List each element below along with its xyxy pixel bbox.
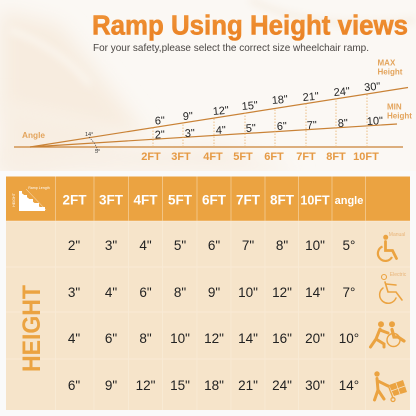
row 2 values	[68, 285, 355, 300]
max height values: 12"	[212, 105, 230, 118]
icon: manual wheelchair: Manual	[389, 232, 405, 238]
row 1 values: 10"	[305, 238, 325, 253]
row 1 values: 4"	[139, 238, 152, 253]
HEIGHT side label: HEIGHT	[18, 285, 46, 372]
header labels: 5FT	[168, 192, 193, 208]
ramp length labels: 2FT	[141, 151, 161, 163]
min height values: 3"	[185, 127, 195, 140]
max height values	[155, 81, 381, 127]
header labels: 2FT	[62, 192, 87, 208]
min height values: 5"	[246, 122, 256, 135]
max height label: Height	[378, 68, 403, 77]
row 3 values: 20"	[305, 331, 325, 346]
max height values: 9"	[183, 110, 193, 123]
min height ramp line	[30, 124, 397, 147]
row 3 values: 16"	[272, 331, 292, 346]
max height values: 6"	[155, 115, 165, 127]
header labels: 3FT	[99, 192, 124, 208]
max height ramp line	[30, 88, 408, 147]
min height values: 6"	[277, 120, 287, 133]
min height label: MIN	[387, 103, 402, 112]
row 3 values: 12"	[204, 331, 224, 346]
header corner diagram	[12, 186, 50, 211]
ramp length labels: 8FT	[326, 151, 346, 163]
table body	[6, 221, 410, 410]
angle values: 5°	[95, 149, 100, 155]
ramp length labels	[141, 151, 379, 163]
ramp length labels: 3FT	[171, 151, 191, 163]
row 4 values: 12"	[136, 378, 156, 393]
icon: person pushing cargo dolly	[374, 371, 407, 402]
row 2 values: 12"	[272, 285, 292, 300]
min height values: 4"	[216, 124, 226, 137]
height guide lines	[153, 93, 367, 147]
row 2 values: 8"	[174, 285, 186, 300]
header labels	[62, 192, 363, 208]
row 3 values: 8"	[139, 331, 152, 346]
max height values: 18"	[271, 94, 289, 107]
row 1 values: 3"	[105, 238, 117, 253]
header corner diagram: HEIGHT	[12, 192, 16, 207]
angle values	[85, 132, 100, 155]
row 2 values: 3"	[68, 285, 80, 300]
row 2 values: 6"	[139, 285, 152, 300]
header labels: 8FT	[270, 192, 295, 208]
ramp length labels: 4FT	[203, 151, 223, 163]
ramp length labels: 5FT	[233, 151, 253, 163]
row 3 values: 14"	[238, 331, 258, 346]
angle arc	[89, 137, 98, 151]
row 1 values	[68, 238, 355, 253]
row 3 values: 4"	[68, 331, 80, 346]
icon: electric wheelchair: Electric	[390, 272, 407, 278]
row 2 values: 10"	[238, 285, 258, 300]
min height values: 10"	[367, 115, 383, 128]
ramp angle diagram	[14, 58, 412, 163]
row 1 values: 7"	[242, 238, 254, 253]
header labels: 10FT	[300, 194, 330, 208]
header labels: 7FT	[236, 192, 261, 208]
min height values: 8"	[338, 117, 348, 130]
grid lines	[6, 176, 410, 410]
max height values: 15"	[241, 100, 258, 113]
row 3 values: 6"	[105, 331, 117, 346]
row 4 values: 14°	[339, 378, 359, 393]
icon: electric wheelchair	[380, 272, 407, 303]
row 4 values: 24"	[272, 378, 292, 393]
max height values: 24"	[333, 86, 350, 99]
row 2 values: 9"	[208, 285, 220, 300]
ramp length labels: 6FT	[264, 151, 284, 163]
table header	[6, 176, 410, 221]
row 4 values: 15"	[170, 378, 190, 393]
ground line	[14, 146, 403, 148]
row 4 values: 6"	[68, 378, 80, 393]
row 4 values: 9"	[105, 378, 117, 393]
subtitle: For your safety,please select the correct size wheelchair ramp.	[93, 43, 369, 54]
ramp length labels: 10FT	[353, 151, 379, 163]
min height values	[155, 115, 383, 141]
row 2 values: 4"	[105, 285, 117, 300]
header labels: angle	[335, 195, 363, 207]
row 3 values: 10°	[339, 331, 359, 346]
row 1 values: 5°	[343, 238, 355, 253]
row 1 values: 6"	[208, 238, 220, 253]
row 4 values	[68, 378, 359, 393]
angle label: Angle	[22, 130, 45, 140]
header labels: 6FT	[202, 192, 227, 208]
icon: manual wheelchair	[378, 232, 405, 261]
min height values: 7"	[307, 119, 317, 132]
row 2 values: 14"	[305, 285, 325, 300]
row 4 values: 21"	[238, 378, 258, 393]
max height values: 21"	[302, 91, 319, 104]
row 1 values: 2"	[68, 238, 80, 253]
max height values: 30"	[364, 81, 381, 94]
row 2 values: 7°	[343, 285, 355, 300]
header corner diagram: Ramp Length	[28, 186, 50, 190]
angle values: 14°	[85, 132, 93, 138]
row 4 values: 30"	[305, 378, 325, 393]
min height values: 2"	[155, 129, 165, 141]
row 3 values: 10"	[170, 331, 190, 346]
row 4 values: 18"	[204, 378, 224, 393]
max height label: MAX	[378, 58, 396, 68]
row 3 values	[68, 331, 359, 346]
row 1 values: 5"	[174, 238, 186, 253]
min height label: Height	[387, 112, 412, 121]
row 1 values: 8"	[276, 238, 288, 253]
ramp length labels: 7FT	[296, 151, 316, 163]
icon: caregiver pushing wheelchair	[370, 321, 404, 347]
header labels: 4FT	[133, 192, 158, 208]
height table	[6, 176, 410, 410]
